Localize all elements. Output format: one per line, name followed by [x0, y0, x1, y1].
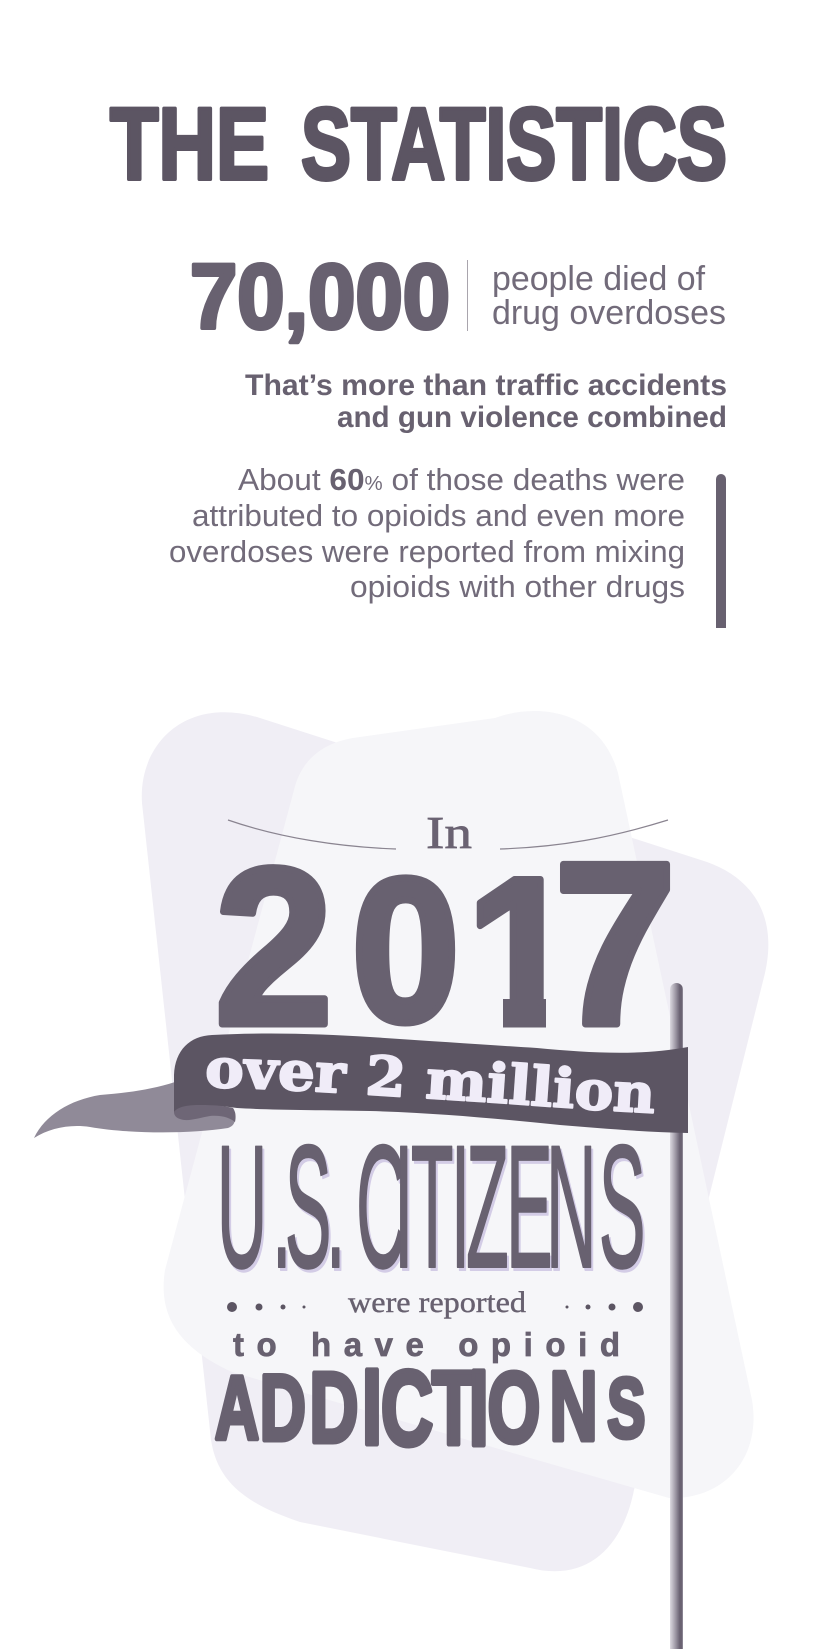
ribbon text	[205, 1087, 660, 1113]
background blob: darker	[142, 712, 768, 1571]
text: ADDICTIONS: N	[549, 1351, 598, 1461]
text: 60% paragraph: opioids with other drugs	[350, 569, 685, 604]
year: 2017: 1	[466, 835, 577, 1069]
text: ADDICTIONS: C	[381, 1349, 433, 1468]
text: ADDICTIONS: T	[432, 1350, 475, 1467]
ribbon tail	[34, 1082, 235, 1138]
text: comparison statement: and gun violence combined	[337, 401, 727, 434]
background blob: lighter	[164, 711, 754, 1498]
text: 60% paragraph: attributed to opioids and even more	[192, 498, 685, 533]
text: ADDICTIONS: D	[260, 1356, 306, 1461]
text: U.S. CITIZENS: U.S. CITIZENS	[217, 1109, 645, 1305]
flag ribbon: over 2 million	[206, 1054, 654, 1114]
text: to have opioid: to have opioid	[233, 1326, 620, 1363]
year: 2017: 0	[352, 836, 460, 1065]
title	[110, 87, 727, 201]
dots: right	[566, 1302, 643, 1312]
text: 60% paragraph	[169, 462, 685, 604]
dots: left	[227, 1302, 306, 1312]
text: people died of drug overdoses	[492, 260, 726, 332]
curved rule: left	[228, 820, 396, 849]
text: people died of drug overdoses: people died of	[492, 260, 706, 298]
text: ADDICTIONS: O	[488, 1353, 540, 1464]
year: 2017: 2	[215, 822, 333, 1072]
ribbon band	[174, 1034, 688, 1133]
text: 60% paragraph: overdoses were reported from mixing	[169, 534, 685, 569]
accent bar	[716, 474, 726, 628]
curved rule: right	[500, 820, 668, 849]
text: comparison statement: That’s more than traffic accidents	[245, 369, 727, 402]
text: ADDICTIONS: I	[469, 1347, 489, 1468]
year: 2017	[218, 860, 670, 1028]
text: were reported: were reported	[348, 1286, 526, 1319]
big number: 70,000: 70,000	[190, 246, 450, 348]
text: people died of drug overdoses: drug overdoses	[492, 294, 726, 332]
text: 60% paragraph: About 60% of those deaths were	[238, 462, 685, 497]
ribbon fold	[174, 1105, 236, 1122]
text: ADDICTIONS: A	[215, 1358, 259, 1459]
year: 2017: 7	[554, 814, 676, 1073]
text: ADDICTIONS: I	[362, 1346, 382, 1467]
heading: In: In	[426, 807, 472, 858]
flag pole	[670, 983, 683, 1649]
divider	[467, 260, 468, 331]
flag ribbon	[34, 1034, 688, 1138]
text: comparison statement	[245, 369, 727, 434]
title: THE	[110, 87, 269, 201]
text: ADDICTIONS: D	[309, 1353, 359, 1464]
text: ADDICTIONS: S	[607, 1362, 645, 1456]
